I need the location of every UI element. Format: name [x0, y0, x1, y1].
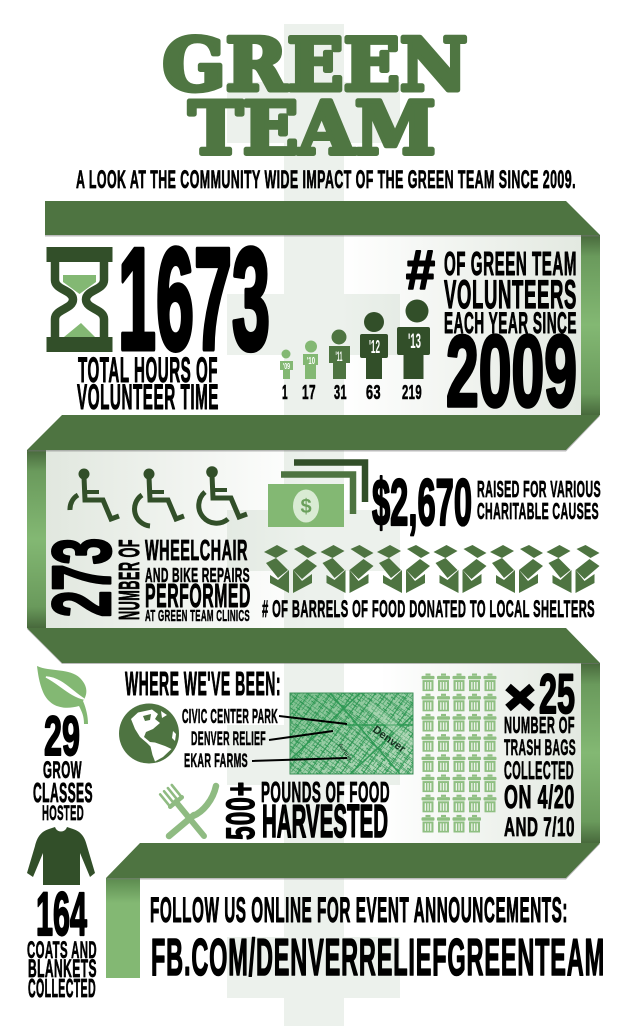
stat: wheelchair repairs: AND BIKE REPAIRS [145, 565, 250, 587]
stat: wheelchair repairs: WHEELCHAIR [145, 535, 248, 567]
ribbon: banner 3 [27, 628, 600, 664]
figure 2010: '10 [307, 356, 315, 367]
stat: grow classes: HOSTED [42, 802, 84, 825]
map of Denver [290, 693, 413, 774]
stat: wheelchair repairs [35, 535, 251, 625]
figure 2012: '12 [369, 337, 380, 357]
map labels and pointers: DENVER RELIEF [191, 729, 266, 750]
volunteer counts: 31 [334, 382, 347, 404]
volunteer counts: 63 [366, 382, 381, 404]
stat: grow classes [33, 704, 93, 825]
stat: coats and blankets: 164 [36, 880, 87, 948]
infographic canvas: PERFORMED [145, 577, 251, 614]
text: number of volunteers [406, 238, 577, 428]
title: GREEN [162, 22, 468, 107]
stat: total hours [77, 218, 270, 417]
map of Denver: Denver [370, 724, 408, 756]
stat: total hours: TOTAL HOURS OF [78, 351, 218, 390]
stat: coats and blankets [27, 880, 97, 1003]
volunteer counts: 219 [402, 382, 422, 404]
icon: fork and knife [160, 785, 216, 836]
icons: wheelchairs [70, 466, 247, 526]
stat: grow classes: GROW [43, 757, 82, 784]
stat: trash bags: AND 7/10 [504, 812, 575, 842]
wheelchair 2 [135, 468, 184, 526]
stat: trash bags: ON 4/20 [504, 779, 575, 815]
background cross pattern [227, 24, 400, 1026]
figure 2009 [280, 350, 293, 379]
map of Denver: Auraria [336, 743, 353, 763]
ribbon: banner 4 [106, 843, 600, 880]
stat: total hours: VOLUNTEER TIME [77, 378, 219, 417]
stat: wheelchair repairs: AT GREEN TEAM CLINICS [145, 608, 250, 625]
figure 2011: '11 [336, 348, 343, 364]
stat: money raised: $2,670 [372, 465, 472, 539]
icon: long-sleeve shirt [27, 827, 95, 885]
stat: trash bags: 25 [539, 662, 575, 725]
icons: trash cans [422, 674, 496, 832]
infographic canvas: 1673 [118, 218, 270, 380]
volunteer counts: 1 [282, 382, 288, 404]
infographic canvas: WHERE WE'VE BEEN: [125, 665, 281, 702]
figure 2009: '09 [283, 362, 290, 371]
text: number of volunteers: # [406, 238, 435, 301]
infographic canvas: COATS AND [27, 937, 97, 964]
call to action [150, 891, 605, 987]
infographic canvas: CLASSES [33, 777, 93, 808]
stat: wheelchair repairs: 273 [35, 538, 128, 617]
ribbon: folds and panels [27, 235, 600, 978]
icon: money: $ [300, 496, 312, 518]
figure 2010 [303, 340, 318, 379]
map labels and pointers: CIVIC CENTER PARK [182, 706, 278, 728]
figure 2011 [329, 330, 350, 379]
wheelchair 3 [199, 466, 247, 523]
icon: leaf [37, 666, 88, 724]
map labels and pointers: EKAR FARMS [184, 751, 248, 772]
title [162, 22, 468, 170]
icons: barrels of food boxes [264, 545, 600, 593]
infographic canvas: POUNDS OF FOOD [261, 777, 390, 809]
title: TEAM [188, 86, 436, 170]
figure 2013 [397, 300, 430, 379]
infographic canvas: NUMBER OF [114, 539, 146, 620]
infographic canvas: BLANKETS [28, 955, 97, 983]
stat: trash bags [504, 662, 576, 842]
stat: pounds harvested [219, 777, 390, 847]
figure 2012 [360, 312, 388, 379]
infographic canvas: HARVESTED [262, 795, 388, 847]
wheelchair 1 [70, 468, 119, 519]
stat: pounds harvested: 500+ [219, 781, 263, 840]
stat: grow classes: 29 [44, 704, 80, 767]
ribbon: banner 2 [27, 415, 600, 452]
icon: hourglass [46, 247, 112, 352]
map labels and pointers [182, 706, 347, 772]
figure 2013: '13 [408, 330, 421, 353]
infographic canvas: COLLECTED [28, 973, 96, 1003]
icon: globe [119, 704, 179, 764]
volunteer counts [282, 382, 422, 404]
icon: money [268, 462, 365, 527]
chart: volunteers per year [280, 300, 430, 404]
ribbon: banner 1 [45, 201, 600, 236]
volunteer counts: 17 [302, 382, 316, 404]
